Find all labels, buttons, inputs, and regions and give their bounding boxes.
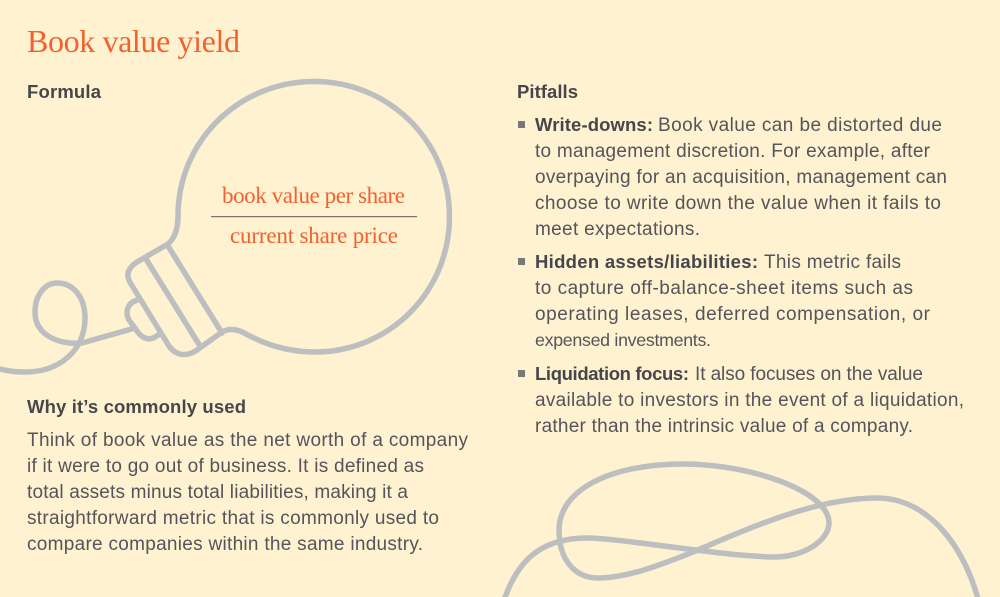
pitfall: liquidation focus: Liquidation focus: xyxy=(535,363,689,384)
text block: explanation: compare companies within the same industry. xyxy=(27,534,423,555)
pitfall: hidden assets/liabilities: operating leases, deferred compensation, or xyxy=(535,304,931,325)
formula: denominator: current share price xyxy=(230,223,398,248)
title: Book value yield xyxy=(27,23,240,59)
pitfall: hidden assets/liabilities: This metric fails xyxy=(764,252,901,273)
pitfall: write-downs: overpaying for an acquisition, management can xyxy=(535,167,947,188)
pitfall: liquidation focus: rather than the intrinsic value of a company. xyxy=(535,416,913,437)
formula: divider xyxy=(211,216,417,217)
pitfall: write-downs: Book value can be distorted due xyxy=(658,115,942,136)
pitfall: liquidation focus xyxy=(518,363,964,437)
pitfall: liquidation focus: It also focuses on the value xyxy=(695,364,923,385)
pitfall: hidden assets/liabilities xyxy=(518,251,931,350)
text block: explanation: straightforward metric that is commonly used to xyxy=(27,508,439,529)
text block: explanation: total assets minus total liabilities, making it a xyxy=(27,482,408,503)
pitfall: write-downs: meet expectations. xyxy=(535,219,700,240)
pitfall: liquidation focus: available to investors in the event of a liquidation, xyxy=(535,390,964,411)
heading: why it's commonly used: Why it’s commonly used xyxy=(27,396,246,417)
pitfall: write-downs: to management discretion. For example, after xyxy=(535,141,931,162)
pitfall: write-downs: choose to write down the value when it fails to xyxy=(535,193,941,214)
panel: why it's commonly used xyxy=(27,396,468,555)
text block: explanation: Think of book value as the net worth of a company xyxy=(27,430,468,451)
pitfall: hidden assets/liabilities: Hidden assets/liabilities: xyxy=(535,251,758,272)
pitfall: hidden assets/liabilities: expensed investments. xyxy=(535,330,711,350)
text block: explanation: if it were to go out of business. It is defined as xyxy=(27,456,424,477)
icon: light bulb with cord xyxy=(0,82,450,372)
heading: formula: Formula xyxy=(27,81,102,102)
pitfall: write-downs xyxy=(518,114,947,240)
panel: pitfalls xyxy=(517,81,964,437)
icon: looping cord xyxy=(503,464,979,597)
heading: pitfalls: Pitfalls xyxy=(517,81,578,102)
panel: formula xyxy=(0,81,450,372)
text block: explanation xyxy=(27,430,468,555)
pitfall: write-downs: Write-downs: xyxy=(535,114,653,135)
formula: numerator: book value per share xyxy=(222,183,405,208)
pitfall: hidden assets/liabilities: to capture off-balance-sheet items such as xyxy=(535,278,913,299)
